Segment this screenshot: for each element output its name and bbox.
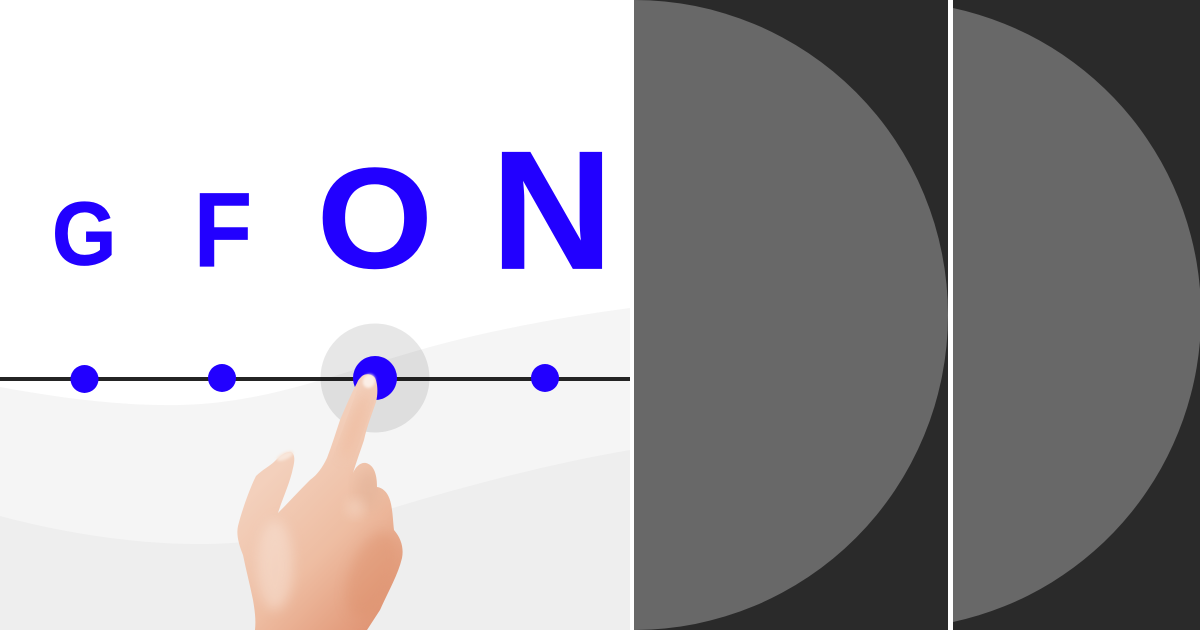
icon: pointing hand [237, 372, 408, 630]
background wave: darker grey [0, 450, 630, 630]
grey semicircle left [634, 0, 948, 630]
timeline dot F [208, 364, 236, 392]
highlight halo [320, 324, 430, 432]
timeline dot O (active) [353, 356, 397, 400]
letter F: F [194, 171, 252, 289]
letter O: O [317, 138, 433, 298]
timeline dot N [531, 364, 559, 392]
timeline line [0, 377, 630, 381]
fingernail: index [361, 372, 377, 390]
panel: dark left [634, 0, 948, 630]
fingernail: thumb [275, 449, 295, 463]
grey semicircle right [953, 8, 1200, 622]
letter N: N [491, 116, 613, 304]
panel: dark right [953, 0, 1200, 630]
timeline dot G [70, 365, 98, 393]
letter G: G [52, 184, 116, 284]
background: white left panel [0, 0, 630, 630]
background wave: light grey [0, 308, 630, 630]
